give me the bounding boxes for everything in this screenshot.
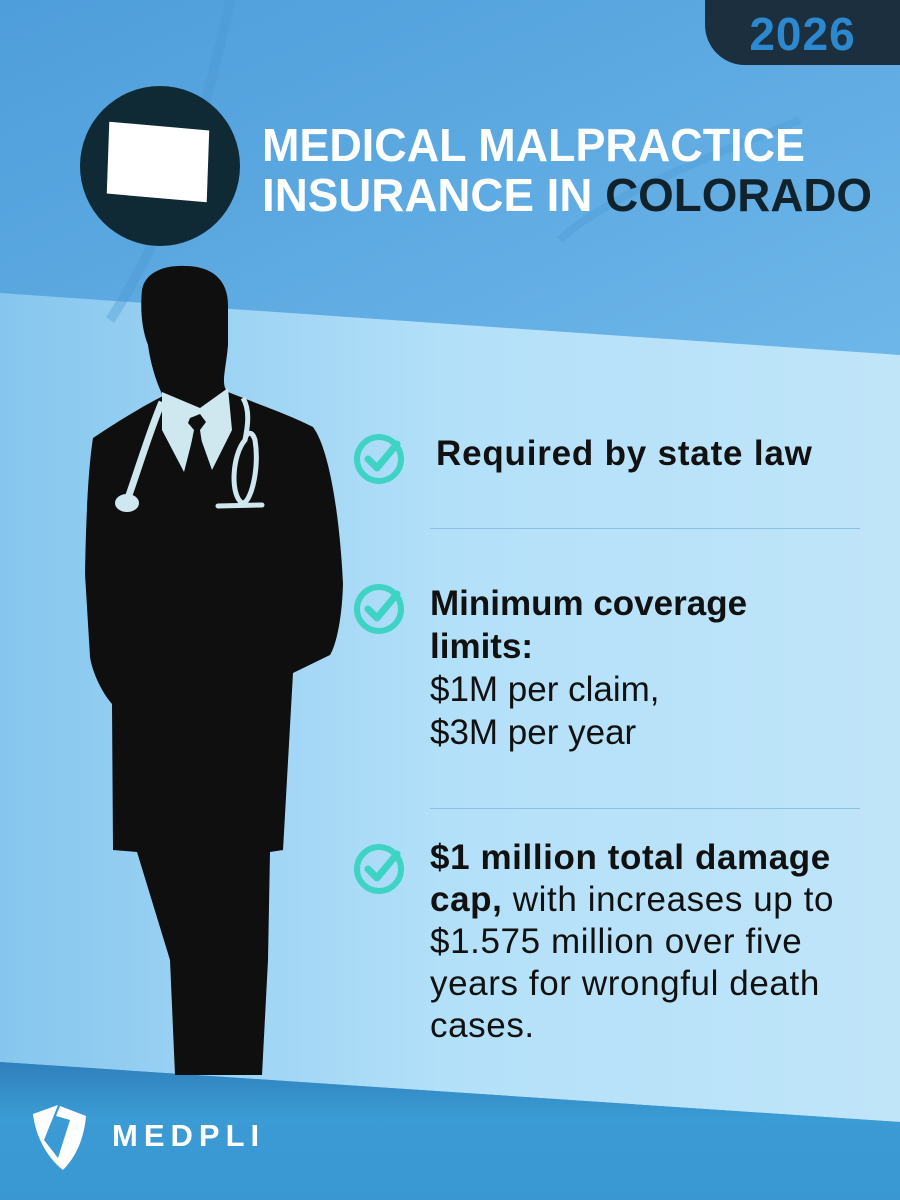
dividers bbox=[430, 528, 860, 529]
logo: MEDPLI bbox=[112, 1118, 265, 1153]
title bbox=[262, 119, 872, 221]
text: item 2 bbox=[430, 584, 747, 752]
text: item 3: cases. bbox=[430, 1006, 535, 1045]
text: item 2: Minimum coverage bbox=[430, 584, 747, 623]
text: item 2: $3M per year bbox=[430, 713, 636, 752]
text: item 3: cap, with increases up to bbox=[430, 880, 834, 919]
text: item 3 bbox=[430, 838, 834, 1045]
collar bbox=[162, 388, 232, 472]
title: MEDICAL MALPRACTICE bbox=[262, 119, 805, 171]
badge: year bbox=[705, 0, 900, 65]
text: item 2: limits: bbox=[430, 627, 533, 666]
text: item 3: years for wrongful death bbox=[430, 964, 820, 1003]
title: INSURANCE IN COLORADO bbox=[262, 169, 872, 221]
text: item 3: $1 million total damage bbox=[430, 838, 831, 877]
icon: colorado state bbox=[80, 86, 240, 246]
icon: check 3 bbox=[354, 844, 404, 894]
text: item 1: Required by state law bbox=[436, 434, 813, 473]
text: item 2: $1M per claim, bbox=[430, 670, 660, 709]
badge: year: 2026 bbox=[749, 8, 856, 60]
text: item 3: $1.575 million over five bbox=[430, 922, 802, 961]
icon: check 2 bbox=[354, 584, 404, 634]
icon: check 1 bbox=[354, 434, 404, 484]
logo bbox=[33, 1105, 265, 1170]
stethoscope bbox=[128, 402, 162, 498]
